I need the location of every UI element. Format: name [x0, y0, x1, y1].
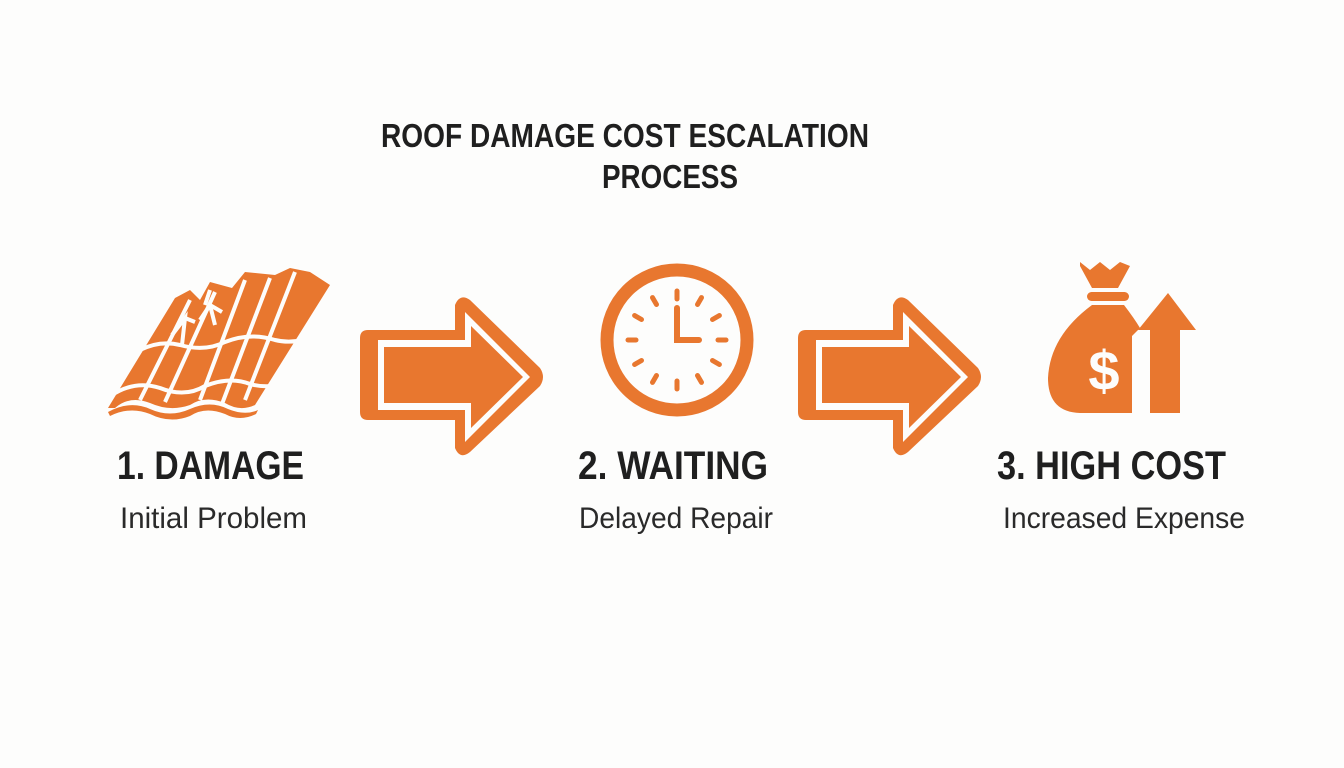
step 2 text — [578, 444, 773, 535]
step 2 text: 2. WAITING — [578, 444, 768, 488]
arrow 1 — [360, 297, 543, 455]
step 1 text — [117, 444, 307, 535]
icon: money bag with up arrow — [1048, 262, 1196, 413]
title: PROCESS — [602, 158, 738, 195]
step 1 text: 1. DAMAGE — [117, 444, 304, 488]
icon: clock — [607, 270, 747, 410]
step 2 text: Delayed Repair — [579, 502, 773, 535]
title: ROOF DAMAGE COST ESCALATION — [381, 117, 869, 154]
step 3 text: 3. HIGH COST — [997, 444, 1226, 488]
arrow 2 — [798, 297, 981, 455]
step 3 text — [997, 444, 1245, 535]
title — [381, 117, 869, 195]
step 3 text: Increased Expense — [1003, 502, 1245, 535]
step 1 text: Initial Problem — [120, 502, 307, 535]
icon: damaged roof tiles — [108, 268, 330, 420]
icon: money bag with up arrow: $ — [1088, 339, 1120, 402]
